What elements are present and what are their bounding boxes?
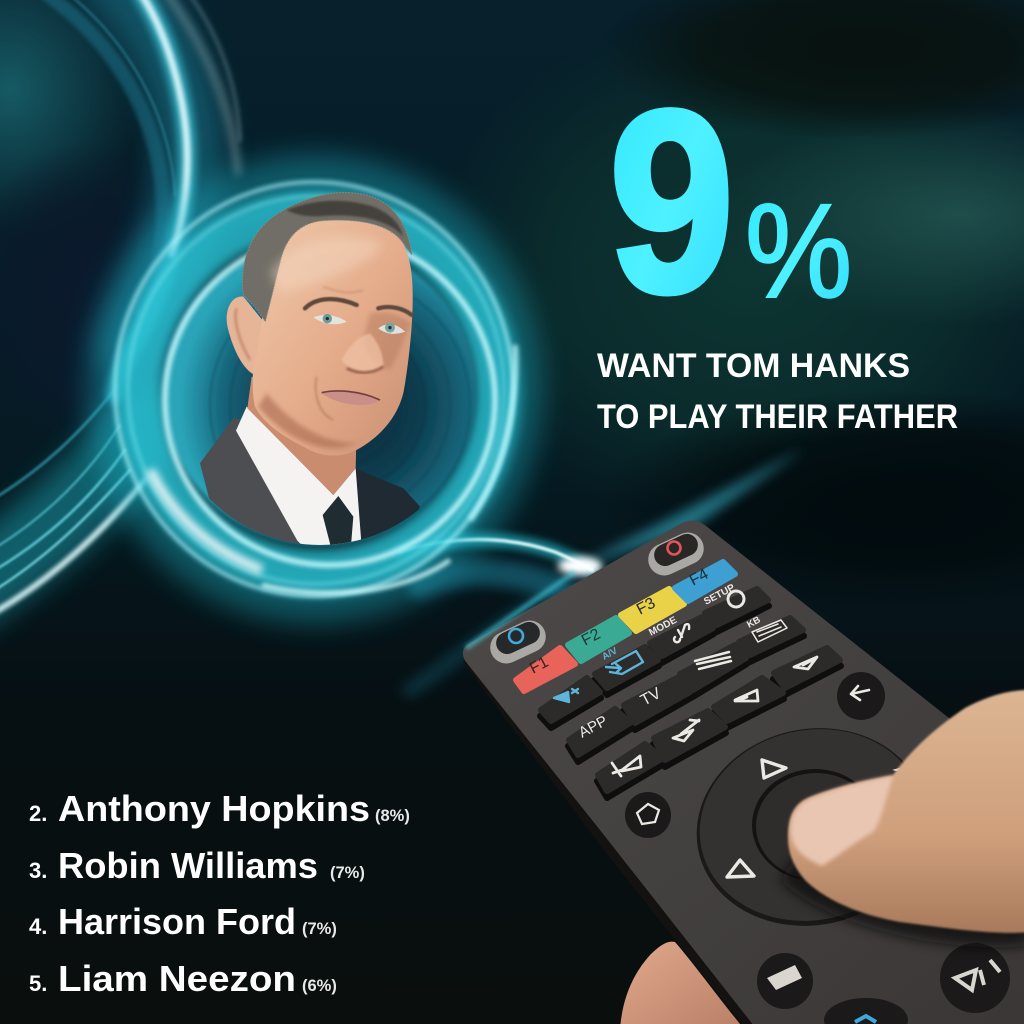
key icons: [554, 591, 817, 776]
app key: [569, 709, 630, 755]
button F1: F1: [527, 654, 551, 678]
row 4: (7%): [302, 920, 337, 938]
icon: mute: [554, 689, 578, 702]
row 2: Anthony Hopkins: [58, 788, 370, 829]
row 5: 5.: [29, 971, 47, 996]
portrait face: [253, 218, 413, 456]
remote side edge: [463, 650, 790, 1024]
icon: skip forward: [673, 720, 699, 741]
colour buttons: [516, 562, 735, 691]
power button red: [643, 527, 709, 581]
row 4: Harrison Ford: [58, 901, 296, 942]
row 3: Robin Williams: [58, 845, 318, 886]
headline caption: TO PLAY THEIR FATHER: [597, 398, 958, 436]
portrait eyes: [313, 314, 405, 334]
thumb: [788, 690, 1024, 933]
portrait neck: [247, 377, 357, 495]
runners up list: [29, 788, 410, 999]
thumb shadow: [780, 850, 1024, 947]
percent sign: %: [745, 177, 852, 326]
skip back key: [598, 744, 663, 791]
key labels: A/V: [600, 645, 620, 663]
portrait mouth: [322, 390, 380, 405]
lower finger: [620, 942, 745, 1024]
button shadows: [540, 594, 841, 798]
icon: menu lines: [695, 652, 731, 669]
portrait shirt: [236, 407, 362, 547]
icon: input: [606, 651, 643, 674]
stop button: [757, 953, 813, 1009]
portrait jacket right: [356, 468, 420, 541]
mute key: [541, 678, 600, 721]
mode key: [650, 617, 713, 656]
portrait jacket left: [200, 418, 300, 553]
row 3: 3.: [29, 858, 47, 883]
button F4: [675, 562, 735, 601]
key labels: SETUP: [702, 582, 737, 608]
dpad arrow right, peeking behind thumb: [892, 766, 906, 773]
dark function buttons: [541, 589, 840, 791]
bottom blue button: [824, 998, 908, 1024]
big nine: 9: [609, 57, 734, 346]
remote body: [463, 521, 1024, 1024]
button F4: F4: [687, 566, 711, 590]
portrait facial shading: [258, 236, 412, 448]
headline caption: [597, 347, 958, 436]
button F2: [568, 618, 629, 661]
power button blue: [485, 615, 551, 669]
icon: fast forward: [794, 657, 817, 669]
icon: keyboard: [752, 620, 787, 642]
key labels: TV: [638, 685, 664, 710]
menu key: [680, 645, 746, 690]
portrait tie: [323, 496, 353, 550]
icon: rewind: [735, 690, 758, 701]
row 2: (8%): [375, 807, 410, 825]
button F2: F2: [579, 626, 603, 650]
row 5: (6%): [302, 977, 337, 995]
dpad arrow left: [727, 860, 754, 877]
home button: [625, 792, 671, 838]
portrait of Tom Hanks: [200, 192, 420, 553]
back button: [837, 672, 885, 720]
hand holding remote: [620, 690, 1024, 1024]
key labels: APP: [576, 712, 610, 742]
icon: music note: [674, 624, 689, 642]
row 5: Liam Neezon: [58, 958, 296, 999]
directional pad: [678, 707, 946, 947]
key labels: MODE: [647, 615, 679, 639]
dpad arrow up: [762, 760, 786, 778]
tv key: [624, 678, 690, 723]
setup key: [705, 589, 768, 625]
row 3: (7%): [330, 864, 365, 882]
keyboard key: [739, 618, 803, 655]
key labels: KB: [745, 614, 763, 631]
fast forward key: [774, 648, 840, 688]
portrait hair: [243, 192, 412, 322]
light swirl streams: [0, 0, 805, 690]
headline caption: WANT TOM HANKS: [597, 347, 910, 385]
portrait ear: [227, 297, 265, 375]
rewind key: [714, 678, 783, 721]
portrait eyebrows: [305, 299, 412, 315]
button F1: [516, 648, 575, 691]
icon: skip back: [612, 756, 641, 776]
row 2: 2.: [29, 801, 47, 826]
AV key: [595, 647, 658, 688]
button F3: [621, 589, 684, 631]
button F3: F3: [634, 595, 658, 619]
play pause button: [940, 943, 1010, 1013]
key labels: [576, 582, 763, 742]
glowing portrait ring: [110, 177, 520, 601]
thumbnail: [791, 776, 893, 866]
remote control: [463, 521, 1024, 1024]
percentage headline: [609, 57, 852, 346]
icon: gear: [728, 591, 744, 607]
row 4: 4.: [29, 914, 47, 939]
skip forward key: [654, 711, 725, 760]
